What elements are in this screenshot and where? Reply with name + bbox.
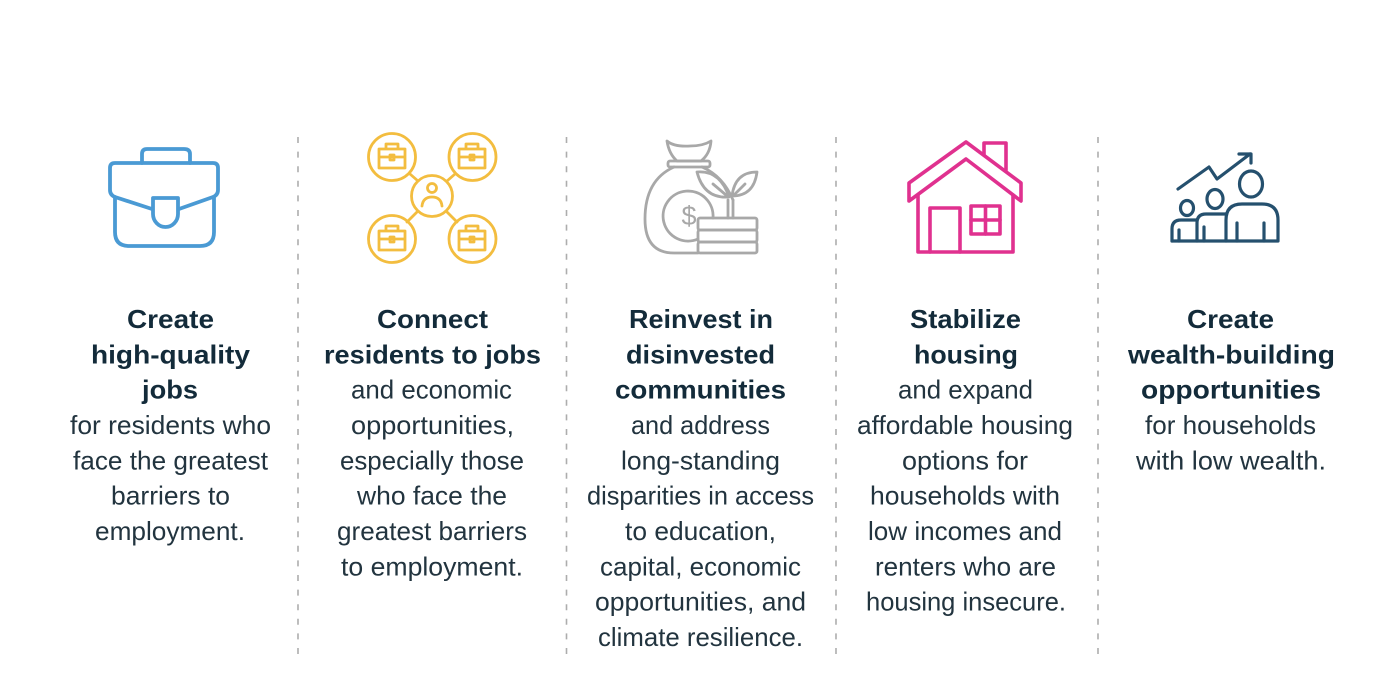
text: connect residents to jobs: greatest barriers bbox=[337, 516, 527, 546]
text: reinvest in disinvested communities: Reinvest in bbox=[629, 304, 773, 334]
text: connect residents to jobs: Connect bbox=[377, 304, 488, 334]
text: create wealth-building opportunities: opportunities bbox=[1141, 375, 1321, 405]
icon: people with rising arrow bbox=[1172, 154, 1278, 241]
text: connect residents to jobs: and economic bbox=[351, 375, 512, 405]
icon: pink house bbox=[909, 142, 1021, 252]
text: create high-quality jobs: jobs bbox=[141, 375, 198, 405]
text: create wealth-building opportunities: Create bbox=[1187, 304, 1274, 334]
text: stabilize housing: households with bbox=[870, 481, 1060, 511]
text: create wealth-building opportunities bbox=[1127, 304, 1335, 475]
panel: stabilize housing bbox=[857, 142, 1073, 617]
text: reinvest in disinvested communities: capital, economic bbox=[600, 551, 801, 581]
text: stabilize housing: Stabilize bbox=[910, 304, 1021, 334]
text: create high-quality jobs: barriers to bbox=[111, 481, 230, 511]
text: reinvest in disinvested communities: disparities in access bbox=[587, 481, 814, 511]
text: reinvest in disinvested communities bbox=[587, 304, 814, 652]
text: connect residents to jobs: especially those bbox=[340, 445, 524, 475]
text: create wealth-building opportunities: with low wealth. bbox=[1135, 445, 1326, 475]
text: connect residents to jobs: residents to jobs bbox=[324, 339, 541, 369]
text: reinvest in disinvested communities: disinvested bbox=[626, 339, 775, 369]
text: connect residents to jobs: who face the bbox=[356, 481, 507, 511]
text: reinvest in disinvested communities: climate resilience. bbox=[598, 622, 803, 652]
text: stabilize housing: options for bbox=[902, 445, 1028, 475]
text: reinvest in disinvested communities: opportunities, and bbox=[595, 587, 806, 617]
panel: create high-quality jobs bbox=[70, 149, 271, 546]
text: reinvest in disinvested communities: long-standing bbox=[621, 445, 780, 475]
text: connect residents to jobs bbox=[324, 304, 541, 581]
panel: create wealth-building opportunities bbox=[1127, 154, 1335, 475]
text: stabilize housing: and expand bbox=[898, 375, 1033, 405]
text: stabilize housing bbox=[857, 304, 1073, 617]
icon: network of person and briefcases bbox=[368, 134, 496, 262]
text: create high-quality jobs: high-quality bbox=[91, 339, 251, 369]
text: create wealth-building opportunities: for households bbox=[1145, 410, 1316, 440]
text: connect residents to jobs: to employment. bbox=[341, 551, 523, 581]
text: stabilize housing: housing bbox=[914, 339, 1018, 369]
text: stabilize housing: housing insecure. bbox=[866, 587, 1066, 617]
text: create high-quality jobs: employment. bbox=[95, 516, 245, 546]
panel: connect residents to jobs bbox=[324, 134, 541, 581]
text: connect residents to jobs: opportunities, bbox=[351, 410, 514, 440]
text: create high-quality jobs: for residents who bbox=[70, 410, 271, 440]
text: create high-quality jobs: Create bbox=[127, 304, 214, 334]
text: create high-quality jobs bbox=[70, 304, 271, 546]
panel: reinvest in disinvested communities bbox=[587, 141, 814, 652]
text: reinvest in disinvested communities: to education, bbox=[625, 516, 776, 546]
icon: blue briefcase bbox=[110, 149, 218, 246]
text: reinvest in disinvested communities: and address bbox=[631, 410, 770, 440]
text: stabilize housing: low incomes and bbox=[868, 516, 1062, 546]
text: create high-quality jobs: face the greatest bbox=[73, 445, 269, 475]
icon: money bag, coins and plant bbox=[645, 141, 757, 253]
text: reinvest in disinvested communities: communities bbox=[615, 375, 786, 405]
text: stabilize housing: affordable housing bbox=[857, 410, 1073, 440]
text: create wealth-building opportunities: wealth-building bbox=[1127, 339, 1335, 369]
icon: money bag, coins and plant: $ bbox=[681, 201, 697, 231]
text: stabilize housing: renters who are bbox=[875, 551, 1056, 581]
